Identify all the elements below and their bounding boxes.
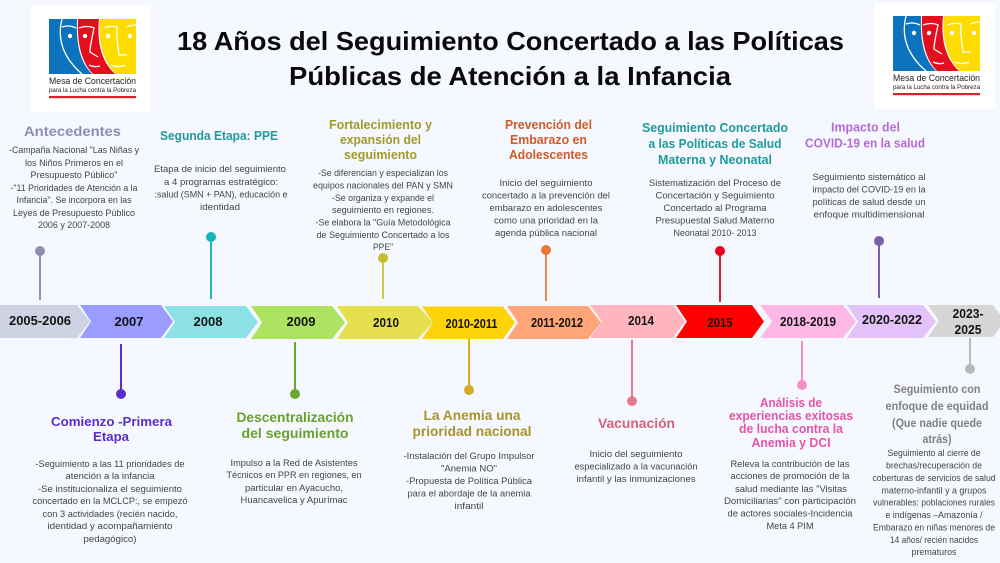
body text: [482, 178, 610, 238]
body text: particular en Ayacucho,: [245, 483, 343, 493]
arrow: 2015: [676, 305, 764, 338]
marker: Primera Etapa: [116, 344, 126, 399]
marker: Anemia: [464, 339, 474, 395]
logo: left: para la Lucha contra la Pobreza: [49, 87, 137, 94]
body text: de actores sociales-Incidencia: [728, 508, 852, 518]
marker: Descentralización: [290, 342, 300, 399]
title: Públicas de Atención a la Infancia: [289, 61, 732, 91]
body text: -Propuesta de Política Pública: [406, 476, 532, 486]
panel: Anemia: [404, 407, 534, 511]
heading: Comienzo -Primera: [51, 414, 173, 429]
body text: Sistematización del Proceso de: [649, 178, 781, 188]
arrow: 2018-2019: [760, 305, 856, 338]
body text: [32, 459, 188, 544]
body text: brechas/recuperación de: [886, 460, 982, 470]
heading: La Anemia una: [424, 407, 521, 423]
heading: Seguimiento Concertado: [642, 120, 788, 135]
body text: -Seguimiento a las 11 prioridades de: [36, 459, 184, 469]
body text: Releva la contribución de las: [730, 459, 850, 469]
body text: identidad: [200, 202, 240, 212]
arrow: 2020-2022: 2020-2022: [862, 313, 922, 327]
body text: Meta 4 PIM: [766, 521, 814, 531]
marker: Análisis: [797, 341, 807, 390]
body text: Infancia". Se incorpora en las: [16, 195, 132, 205]
body text: para el abordaje de la anemia: [408, 488, 530, 498]
arrow: 2010: 2010: [373, 316, 399, 330]
arrow: 2023-2025: 2023-: [952, 307, 984, 321]
body text: -Instalación del Grupo Impulsor: [404, 451, 534, 461]
arrow: 2014: [590, 305, 685, 338]
heading: Embarazo en: [510, 132, 587, 147]
marker: Fortalecimiento: [378, 253, 388, 299]
panel: Enfoque de equidad: [872, 382, 996, 557]
heading: COVID-19 en la salud: [805, 136, 925, 150]
body text: de Seguimiento Concertado a los: [316, 230, 450, 240]
arrow: 2015: 2015: [708, 316, 733, 330]
body text: especializado a la vacunación: [574, 462, 698, 472]
body text: -Se institucionaliza el seguimiento: [38, 484, 182, 494]
body text: :salud (SMN + PAN), educación e: [154, 190, 288, 200]
body text: vulnerables: poblaciones rurales: [873, 498, 995, 508]
body text: -Se organiza y expande el: [332, 193, 434, 203]
arrow: 2023-2025: 2025: [954, 323, 982, 337]
body text: embarazo en adolescentes: [490, 203, 603, 213]
arrow: 2011-2012: [507, 306, 601, 339]
body text: a 4 programas estratégico:: [164, 177, 278, 187]
heading: [412, 407, 532, 439]
heading: Impacto del: [831, 120, 900, 134]
arrow: 2009: [251, 306, 345, 339]
arrow: 2005-2006: 2005-2006: [9, 314, 71, 328]
body text: como una prioridad en la: [494, 216, 598, 226]
heading: expansión del: [340, 132, 421, 147]
marker: Salud Materna: [715, 246, 725, 302]
body text: infantil y las inmunizaciones: [576, 474, 696, 484]
body text: Domiciliarias" con participación: [724, 496, 856, 506]
arrow: 2023-2025: [928, 305, 1000, 337]
arrow: 2020-2022: [847, 305, 936, 338]
panel: Salud Materna y Neonatal: [642, 120, 788, 238]
heading: seguimiento: [344, 147, 417, 162]
heading: Anemia y DCI: [752, 435, 830, 450]
body text: -Campaña Nacional "Las Niñas y: [9, 145, 139, 155]
marker: Prevención: [541, 245, 551, 301]
body text: [724, 459, 856, 531]
arrow: 2007: 2007: [114, 315, 144, 329]
body text: salud mediante las "Visitas: [735, 484, 848, 494]
heading: enfoque de equidad: [886, 399, 988, 413]
body text: pedagógico): [84, 534, 136, 544]
title: [177, 26, 844, 91]
body text: -Se diferencian y especializan los: [318, 168, 448, 178]
panel: Vacunación: [574, 415, 698, 484]
panel: Análisis de experiencias: [724, 395, 856, 531]
body text: [649, 178, 781, 238]
body text: coberturas de servicios de salud: [872, 473, 996, 483]
body text: [574, 449, 698, 484]
marker: Equidad: [965, 338, 975, 374]
heading: Etapa: [93, 429, 130, 444]
logo: right: Mesa de Concertación: [893, 73, 980, 84]
title: 18 Años del Seguimiento Concertado a las Políticas: [177, 26, 844, 56]
body text: [226, 458, 362, 505]
heading: Fortalecimiento y: [329, 117, 433, 132]
body text: Concertación y Seguimiento: [656, 190, 774, 200]
panel: Fortalecimiento: [313, 117, 453, 252]
body text: [9, 145, 139, 230]
body text: [812, 172, 926, 220]
body text: Técnicos en PPR en regiones, en: [226, 470, 362, 480]
body text: Huancavelica y Apurímac: [240, 495, 348, 505]
panel: Primera Etapa: [32, 414, 188, 544]
body text: los Niños Primeros en el: [25, 158, 123, 168]
panel: Prevención del Embarazo: [482, 117, 610, 238]
heading: [51, 414, 173, 444]
timeline arrows: [0, 305, 1000, 339]
body text: infantil: [454, 501, 484, 511]
body text: [404, 451, 534, 511]
heading: [329, 117, 433, 162]
body text: Etapa de inicio del seguimiento: [154, 164, 286, 174]
panel: Impacto COVID-19: [805, 120, 926, 220]
heading: Vacunación: [598, 415, 675, 431]
body text: Seguimiento sistemático al: [812, 172, 926, 182]
body text: equipos nacionales del PAN y SMN: [313, 180, 453, 190]
arrow: 2011-2012: 2011-2012: [531, 316, 583, 330]
body text: Presupuestal Salud Materno: [656, 216, 774, 226]
body text: [313, 168, 453, 252]
body text: Concertado al Programa: [664, 203, 766, 213]
body text: "Anemia NO": [441, 464, 497, 474]
heading: [886, 382, 988, 446]
heading: Materna y Neonatal: [658, 152, 772, 167]
heading: atrás): [922, 432, 952, 446]
marker: COVID-19: [874, 236, 884, 298]
body text: políticas de salud desde un: [812, 197, 926, 207]
arrow: 2005-2006: [0, 305, 90, 338]
arrow: 2008: [164, 306, 258, 338]
body text: concertado en la MCLCP:, se empezó: [32, 496, 188, 506]
body text: [154, 164, 288, 212]
body text: PPE": [373, 242, 393, 252]
arrow: 2009: 2009: [286, 315, 316, 329]
panel: Descentralización: [226, 409, 362, 505]
marker: Segunda Etapa: [206, 232, 216, 299]
heading: experiencias exitosas: [729, 408, 853, 423]
body text: Embarazo en niñas menores de: [873, 522, 995, 532]
panel: Antecedentes: [9, 123, 139, 230]
heading: Descentralización: [236, 409, 354, 425]
body text: [872, 448, 996, 557]
heading: [642, 120, 788, 167]
heading: de lucha contra la: [739, 421, 844, 436]
body text: con 3 actividades (recién nacido,: [42, 509, 178, 519]
arrow: 2014: 2014: [628, 314, 654, 328]
body text: e indígenas –Amazonía /: [886, 510, 983, 520]
heading: Prevención del: [505, 117, 592, 132]
heading: [729, 395, 853, 450]
body text: materno-infantil y a grupos: [882, 486, 987, 496]
body text: impacto del COVID-19 en la: [812, 184, 926, 194]
logo: left: [31, 5, 151, 112]
panel: Segunda Etapa: [154, 128, 288, 212]
body text: -"11 Prioridades de Atención a la: [10, 183, 138, 193]
arrow: 2010: [337, 306, 433, 339]
body text: Inicio del seguimiento: [500, 178, 592, 188]
body text: concertado a la prevención del: [482, 190, 610, 200]
heading: del seguimiento: [242, 425, 348, 441]
logo: right: para la Lucha contra la Pobreza: [893, 84, 981, 91]
heading: (Que nadie quede: [892, 416, 982, 430]
body text: seguimiento en regiones.: [332, 205, 434, 215]
body text: -Se elabora la "Guía Metodológica: [316, 218, 450, 228]
arrow: 2008: 2008: [194, 315, 223, 329]
arrow: 2010-2011: [422, 306, 515, 339]
body text: prematuros: [912, 547, 957, 557]
body text: 2006 y 2007-2008: [38, 220, 110, 230]
body text: acciones de promoción de la: [730, 471, 850, 481]
heading: Segunda Etapa: PPE: [160, 128, 278, 143]
body text: Leyes de Presupuesto Público: [13, 208, 135, 218]
arrow: 2007: [80, 305, 173, 338]
heading: [236, 409, 354, 441]
body text: identidad y acompañamiento: [48, 521, 172, 531]
heading: Seguimiento con: [894, 382, 980, 396]
body text: 14 años/ recién nacidos: [890, 535, 978, 545]
body text: agenda pública nacional: [495, 228, 597, 238]
heading: Análisis de: [760, 395, 822, 410]
logo: left: Mesa de Concertación: [49, 76, 136, 87]
body text: Seguimiento al cierre de: [888, 448, 980, 458]
logo: right: [874, 3, 995, 109]
heading: prioridad nacional: [412, 423, 532, 439]
body text: Impulso a la Red de Asistentes: [230, 458, 358, 468]
body text: Inicio del seguimiento: [590, 449, 682, 459]
arrow: 2018-2019: 2018-2019: [780, 315, 836, 329]
body text: enfoque multidimensional: [814, 210, 924, 220]
marker: Vacunación: [627, 340, 637, 406]
body text: Presupuesto Público": [30, 170, 118, 180]
heading: [505, 117, 592, 162]
marker: Antecedentes: [35, 246, 45, 300]
heading: Antecedentes: [24, 123, 121, 139]
arrow: 2010-2011: 2010-2011: [446, 317, 498, 331]
body text: Neonatal 2010- 2013: [674, 228, 756, 238]
heading: [805, 120, 925, 150]
body text: atención a la infancia: [66, 471, 154, 481]
heading: a las Políticas de Salud: [648, 136, 782, 151]
heading: Adolescentes: [509, 147, 588, 162]
